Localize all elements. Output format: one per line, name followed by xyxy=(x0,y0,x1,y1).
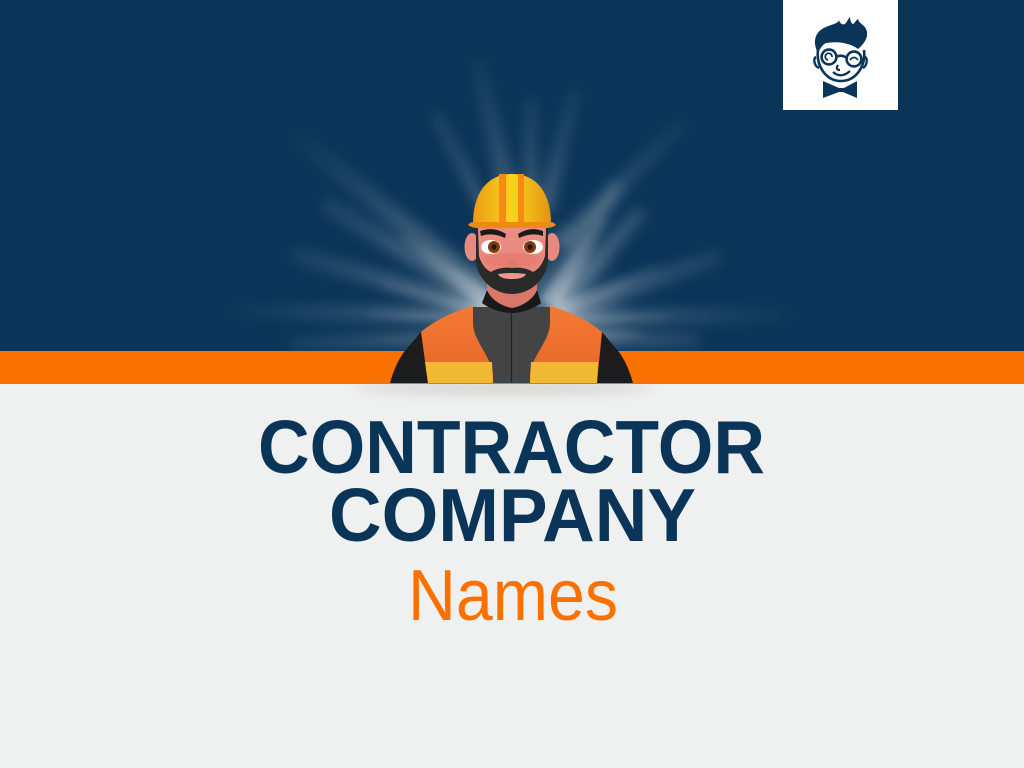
helmet stripes xyxy=(499,174,524,224)
logo: eyes xyxy=(825,53,858,60)
nose xyxy=(507,259,517,267)
sunburst rays xyxy=(230,60,790,351)
zip xyxy=(510,313,512,383)
logo: glasses xyxy=(822,50,861,66)
orange band xyxy=(0,351,1024,384)
vest left xyxy=(421,306,493,383)
sleeves xyxy=(390,325,633,383)
eyes xyxy=(481,240,501,254)
helmet dome xyxy=(473,174,551,224)
vest right xyxy=(530,306,602,383)
pocket right xyxy=(530,362,598,383)
logo: ears xyxy=(814,57,867,68)
helmet brim xyxy=(468,222,556,228)
beard xyxy=(476,228,548,294)
construction worker character xyxy=(390,174,633,383)
logo: hair xyxy=(815,17,867,53)
collar xyxy=(482,290,541,313)
ears xyxy=(464,233,560,261)
title xyxy=(258,405,765,636)
logo: bow tie xyxy=(823,81,857,98)
title line 2: COMPANY xyxy=(329,473,696,557)
neck xyxy=(487,278,537,312)
torso xyxy=(473,307,550,383)
navy header background xyxy=(0,0,1024,351)
head xyxy=(476,222,548,294)
character shadow xyxy=(355,383,655,393)
mouth xyxy=(498,273,526,279)
pocket left xyxy=(425,362,493,383)
title line 1: CONTRACTOR xyxy=(258,405,765,489)
eyebrows xyxy=(480,229,543,238)
irises xyxy=(488,241,500,253)
logo: face outline xyxy=(818,50,864,81)
light lower background xyxy=(0,384,1024,768)
logo badge xyxy=(783,0,898,110)
subtitle: Names xyxy=(408,556,618,636)
cheeks xyxy=(483,253,541,267)
logo: nose and smile xyxy=(833,65,850,75)
